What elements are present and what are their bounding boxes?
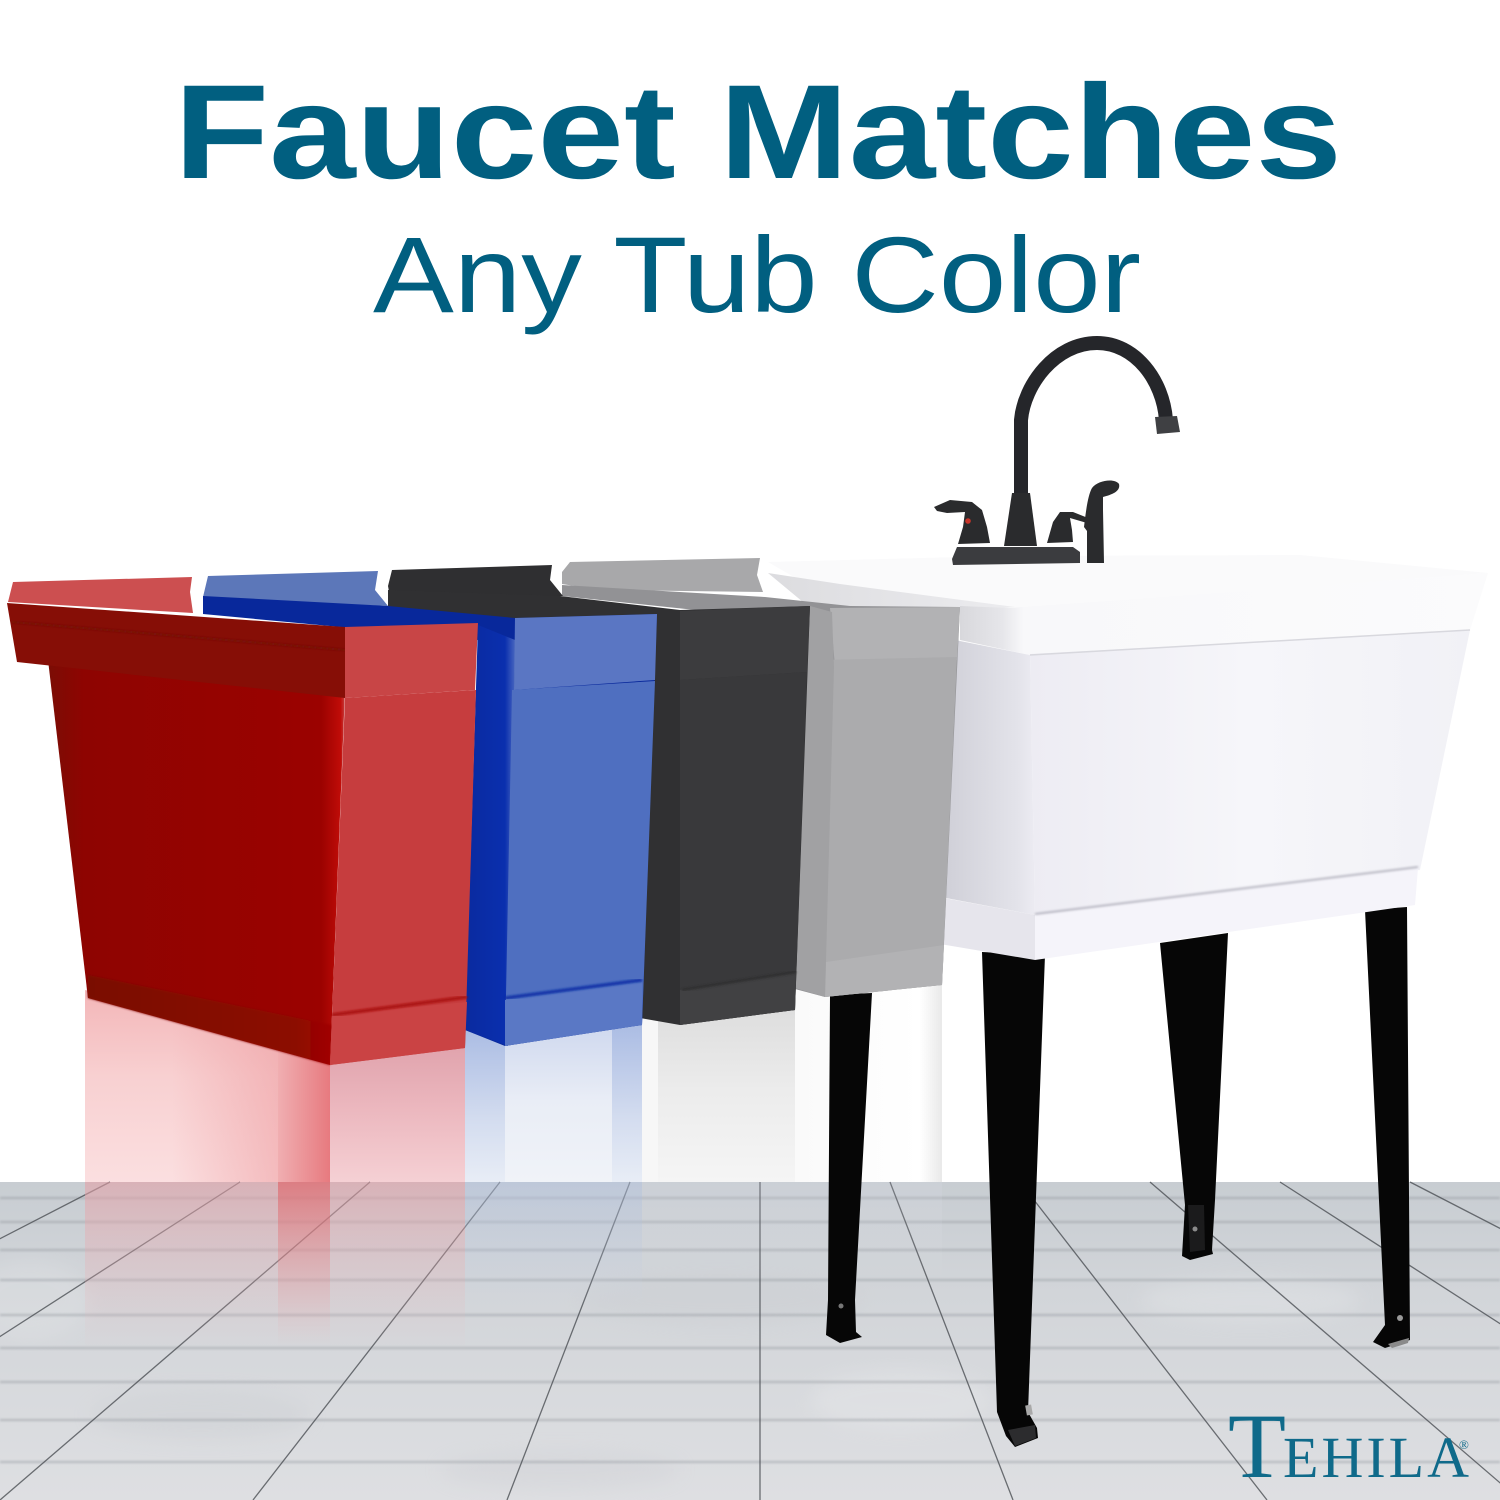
leg: front	[982, 952, 1045, 1447]
subheading: Any Tub Color: Any Tub Color	[373, 214, 1141, 335]
white tub side face	[946, 640, 1035, 915]
faucet: left handle	[934, 500, 990, 544]
faucet	[934, 343, 1180, 565]
leg: rear center	[1160, 933, 1228, 1260]
tub: gray	[562, 558, 960, 997]
tub: black	[388, 565, 810, 1025]
logo: Tehila: T	[1228, 1395, 1286, 1497]
faucet: spout	[1021, 343, 1166, 497]
tub: blue	[203, 571, 657, 1046]
floor reflection of tubs	[85, 1182, 942, 1352]
tub reflections above floor	[85, 975, 942, 1182]
leg: right	[1365, 907, 1410, 1348]
faucet: neck base	[1004, 493, 1037, 546]
tub: red	[7, 577, 478, 1065]
white tub rim	[960, 573, 1488, 655]
leg: left	[826, 993, 872, 1343]
white tub front face	[1030, 630, 1470, 915]
logo: Tehila: ®	[1459, 1437, 1469, 1452]
legs	[826, 907, 1410, 1447]
faucet: sprayer	[1084, 481, 1119, 563]
logo: Tehila	[1228, 1395, 1469, 1497]
floor tile horizontal joints	[0, 1198, 1500, 1462]
logo: Tehila: EHILA	[1283, 1425, 1469, 1490]
floor mottling	[0, 1260, 1360, 1490]
white tub basin top	[768, 555, 1488, 608]
floor tile perspective joints	[0, 1182, 1500, 1500]
title	[174, 58, 1342, 335]
faucet: right handle	[1047, 512, 1088, 543]
faucet: deck plate	[952, 547, 1080, 565]
heading: Faucet Matches: Faucet Matches	[174, 58, 1342, 207]
tub: white	[768, 555, 1488, 960]
floor	[0, 1182, 1500, 1500]
